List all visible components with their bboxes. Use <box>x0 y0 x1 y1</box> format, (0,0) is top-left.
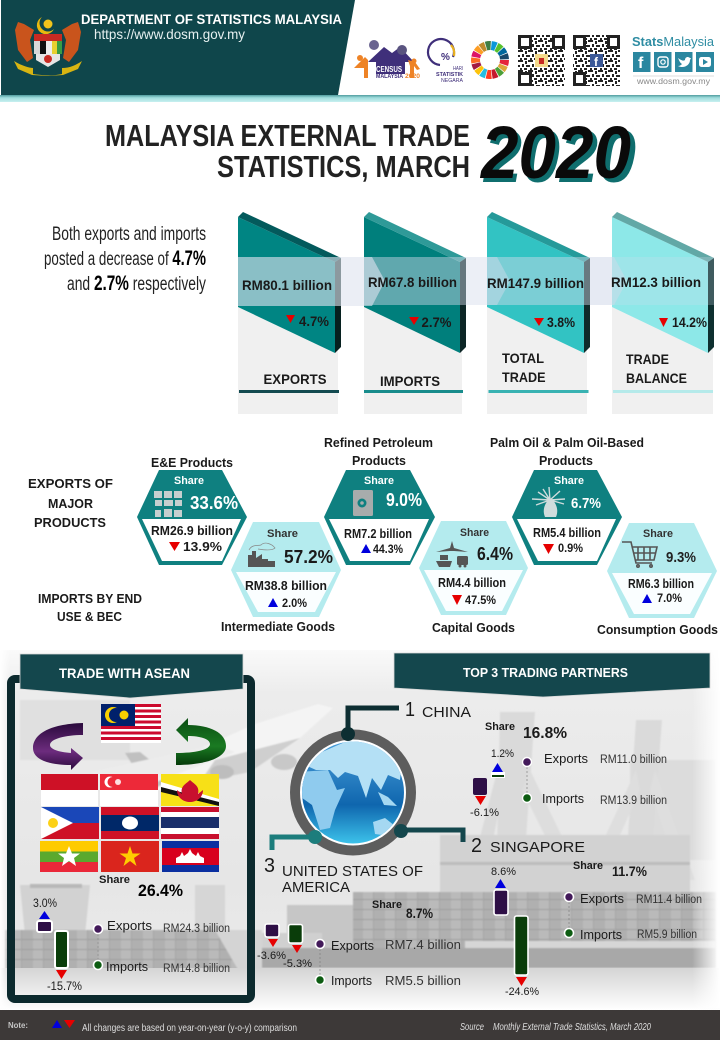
heading: trade with asean: TRADE WITH ASEAN <box>59 665 190 681</box>
icon: plane ship truck <box>436 541 468 568</box>
asean share <box>99 874 183 900</box>
partner: united states of america <box>257 855 461 988</box>
heading: top 3 trading partners <box>394 653 710 697</box>
cranes <box>496 712 535 895</box>
hexagon: refined petroleum products <box>324 436 435 565</box>
label: imports <box>364 373 463 393</box>
hexagon: e&e products <box>137 456 247 565</box>
statsmalaysia social block: www.dosm.gov.my <box>636 77 710 86</box>
summary text: posted a decrease of 4.7% <box>44 247 206 270</box>
logo: hari statistik negara: STATISTIK <box>436 72 463 78</box>
name <box>264 855 423 896</box>
values: Imports <box>580 927 622 942</box>
note label: Note: <box>8 1021 28 1030</box>
hexagon: palm oil products: 6.7% <box>571 495 601 512</box>
legend: asean values <box>94 918 230 975</box>
chart: asean changes <box>33 898 82 993</box>
hexagon: consumption goods: Consumption Goods <box>597 623 718 637</box>
title year 2020: 2020 <box>482 115 636 198</box>
hexagon: capital goods: Share <box>460 527 489 539</box>
chart: asean changes: 3.0% <box>33 898 57 910</box>
hexagon: intermediate goods: 2.0% <box>282 596 307 610</box>
label: total trade: TOTAL <box>502 350 544 366</box>
asean share: Share <box>99 874 130 886</box>
values: Imports <box>331 973 372 988</box>
change: trade balance: 14.2% <box>672 314 707 330</box>
change: exports: 4.7% <box>299 313 330 329</box>
logo: sdg wheel <box>470 40 510 80</box>
heading: exports of major products: EXPORTS OF <box>28 476 113 491</box>
changes <box>470 748 514 819</box>
header: department banner <box>1 0 355 95</box>
logo: census 2020: MALAYSIA <box>376 74 404 80</box>
card: imports <box>364 212 466 414</box>
chart: asean changes: -15.7% <box>47 981 82 993</box>
heading: imports by end use and bec <box>38 592 142 624</box>
hexagon: intermediate goods: Intermediate Goods <box>221 620 335 634</box>
hexagon: palm oil products: 0.9% <box>558 541 583 555</box>
heading: imports by end use and bec: USE & BEC <box>57 610 122 624</box>
card: exports <box>238 212 341 414</box>
values: RM5.9 billion <box>637 929 697 941</box>
summary text: Both exports and imports <box>52 224 206 245</box>
plane <box>125 704 333 792</box>
note text: All changes are based on year-on-year (y-o-y) comparison <box>82 1022 297 1034</box>
changes: 1.2% <box>491 748 514 760</box>
name: 1 <box>405 699 415 721</box>
panel frame <box>11 679 251 999</box>
values: Exports <box>544 751 588 766</box>
title: STATISTICS, MARCH <box>217 149 470 184</box>
share <box>485 721 567 742</box>
change: imports: 2.7% <box>422 314 452 330</box>
summary text: and 2.7% respectively <box>67 272 206 295</box>
hexagon: palm oil products: RM5.4 billion <box>533 526 601 540</box>
flag: singapore <box>100 774 158 806</box>
values: RM7.4 billion <box>385 938 461 952</box>
hexagon: palm oil products: Products <box>539 454 593 468</box>
change: trade balance <box>659 314 707 330</box>
label: exports <box>239 371 339 393</box>
flag: brunei <box>161 774 219 806</box>
share: 16.8% <box>523 725 567 742</box>
hexagon: consumption goods <box>597 523 718 637</box>
title <box>105 111 636 198</box>
statsmalaysia social block <box>632 34 715 86</box>
arrow: exports to asean <box>33 723 83 770</box>
statsmalaysia social block: f <box>638 55 644 72</box>
value: exports: RM80.1 billion <box>242 277 332 293</box>
sky patches <box>630 760 715 860</box>
values: Imports <box>542 791 584 806</box>
flag: laos <box>101 807 159 839</box>
hexagon: refined petroleum products: Refined Petroleum <box>324 436 433 450</box>
hexagon: consumption goods: RM6.3 billion <box>628 577 694 591</box>
ship hull <box>262 948 716 968</box>
logo: census 2020 <box>354 40 421 80</box>
name <box>405 699 471 721</box>
icon: coat of arms <box>14 17 82 76</box>
flag: thailand <box>161 807 219 839</box>
change: exports <box>286 313 330 329</box>
changes <box>257 924 312 970</box>
panel: headline trade figures <box>238 212 714 414</box>
icon: shopping cart <box>622 542 657 567</box>
share: Share <box>485 721 515 733</box>
department name: DEPARTMENT OF STATISTICS MALAYSIA <box>81 12 342 27</box>
header band <box>0 95 720 102</box>
legend: asean values: RM24.3 billion <box>163 923 230 935</box>
arrow band <box>238 257 714 306</box>
hexagon: e&e products: 33.6% <box>190 493 238 513</box>
hexagon: intermediate goods: 57.2% <box>284 547 333 567</box>
value: total trade: RM147.9 billion <box>487 275 584 291</box>
partner: china <box>405 699 667 819</box>
icon: factory <box>248 543 275 567</box>
card: trade balance <box>612 212 714 414</box>
name <box>471 835 585 857</box>
heading: exports of major products <box>28 476 113 530</box>
icon: palm tree <box>532 487 565 517</box>
changes: -6.1% <box>470 807 499 819</box>
values <box>522 751 667 807</box>
changes: -24.6% <box>505 986 539 998</box>
hexagon: intermediate goods: RM38.8 billion <box>245 579 327 593</box>
flag: myanmar <box>40 841 98 872</box>
title: MALAYSIA EXTERNAL TRADE <box>105 118 470 153</box>
logo: hari statistik negara: % <box>441 52 450 63</box>
share: Share <box>573 860 603 872</box>
share: 11.7% <box>612 863 647 879</box>
heading: imports by end use and bec: IMPORTS BY END <box>38 592 142 606</box>
icon: qr code facebook <box>573 35 620 86</box>
change: total trade <box>534 314 575 330</box>
hexagon: refined petroleum products: Share <box>364 475 394 487</box>
partner: singapore <box>471 835 702 998</box>
share <box>573 860 647 879</box>
containers <box>353 892 716 948</box>
changes: 8.6% <box>491 866 516 878</box>
change: imports <box>409 314 452 330</box>
name: UNITED STATES OF <box>282 863 423 880</box>
icon: qr code website <box>518 35 565 86</box>
website: https://www.dosm.gov.my <box>94 26 245 42</box>
values: RM11.4 billion <box>636 894 702 906</box>
globe <box>290 730 416 856</box>
changes: -5.3% <box>283 958 312 970</box>
legend: asean values: Imports <box>106 959 148 974</box>
name: 2 <box>471 835 482 857</box>
flags: asean members <box>40 774 219 872</box>
hexagon: consumption goods: 9.3% <box>666 549 696 566</box>
hexagon: refined petroleum products: RM7.2 billion <box>344 527 412 541</box>
logo: hari statistik negara: NEGARA <box>441 78 463 84</box>
hexagon: intermediate goods: Share <box>267 528 298 540</box>
hexagon: palm oil products <box>490 436 644 565</box>
hexagon: intermediate goods <box>221 522 341 634</box>
hexagon: e&e products: Share <box>174 475 204 487</box>
values: Exports <box>331 938 374 953</box>
icon: up and down triangles <box>52 1020 75 1028</box>
hexagon: refined petroleum products: Products <box>352 454 406 468</box>
summary text <box>44 224 206 295</box>
connector: singapore <box>394 824 463 842</box>
values: RM11.0 billion <box>600 754 667 766</box>
panel: top 3 trading partners <box>257 653 710 998</box>
icon: qr code facebook: f <box>594 55 599 69</box>
hexagon: e&e products: 13.9% <box>183 540 222 554</box>
asean share: 26.4% <box>138 881 183 900</box>
hexagon: capital goods: RM4.4 billion <box>438 576 506 590</box>
name: AMERICA <box>282 879 350 896</box>
title year 2020: 2020 <box>479 111 631 194</box>
hexagon: capital goods: 6.4% <box>477 544 513 564</box>
change: total trade: 3.8% <box>547 314 575 330</box>
connector: united states <box>272 830 322 850</box>
hexagon: e&e products: E&E Products <box>151 456 233 470</box>
label: trade balance: TRADE <box>626 351 669 367</box>
arrow: imports from asean <box>176 718 226 765</box>
hexagon: capital goods <box>419 521 528 635</box>
value: trade balance: RM12.3 billion <box>611 274 701 290</box>
hexagon: capital goods: Capital Goods <box>432 621 515 635</box>
heading: top 3 trading partners: TOP 3 TRADING PARTNERS <box>463 665 628 680</box>
flag: malaysia <box>101 704 161 743</box>
hexagon: refined petroleum products: 9.0% <box>386 490 422 510</box>
panel: trade with asean <box>11 654 251 999</box>
logo: hari statistik negara <box>428 39 463 84</box>
flag: philippines <box>41 807 99 839</box>
heading: exports of major products: MAJOR <box>48 496 94 511</box>
values <box>316 938 461 988</box>
heading: trade with asean <box>20 654 243 698</box>
flag: indonesia <box>41 774 98 806</box>
name: SINGAPORE <box>490 839 585 856</box>
background photo: port and plane <box>0 650 720 1010</box>
label: exports: EXPORTS <box>264 371 326 387</box>
values: RM13.9 billion <box>600 795 667 807</box>
heading: exports of major products: PRODUCTS <box>34 515 106 530</box>
label: trade balance: BALANCE <box>626 370 687 386</box>
source: Source <box>460 1021 484 1033</box>
label: total trade <box>488 350 588 393</box>
card: total trade <box>487 212 590 414</box>
hexagon: palm oil products: Palm Oil & Palm Oil-Based <box>490 436 644 450</box>
share: 8.7% <box>406 905 433 921</box>
logo: census 2020: 2020 <box>405 74 421 80</box>
hexagon: consumption goods: Share <box>643 528 673 540</box>
label: total trade: TRADE <box>502 369 546 385</box>
legend: asean values: RM14.8 billion <box>163 963 230 975</box>
logo: census 2020: CENSUS <box>376 65 403 74</box>
share <box>372 899 433 921</box>
hexagon: refined petroleum products: 44.3% <box>373 542 403 556</box>
statsmalaysia social block: StatsMalaysia <box>632 34 715 49</box>
hexagon: palm oil products: Share <box>554 475 584 487</box>
values: RM5.5 billion <box>385 974 461 988</box>
label: imports: IMPORTS <box>380 373 440 389</box>
hexagon: consumption goods: 7.0% <box>657 591 682 605</box>
source <box>460 1021 651 1033</box>
icon: electronics grid <box>154 491 182 517</box>
source: Monthly External Trade Statistics, March 2020 <box>493 1021 651 1033</box>
logos row <box>354 34 715 86</box>
icon: oil barrel <box>353 490 373 516</box>
legend: asean values: Exports <box>107 918 153 933</box>
changes: -3.6% <box>257 950 286 962</box>
label: trade balance <box>613 351 713 393</box>
logo: hari statistik negara: HARI <box>453 66 463 72</box>
values <box>564 891 702 942</box>
name: CHINA <box>422 704 471 721</box>
flag: vietnam <box>101 841 159 872</box>
hexagon: capital goods: 47.5% <box>465 593 496 607</box>
name: 3 <box>264 855 275 877</box>
flag: cambodia <box>162 841 219 872</box>
value: imports: RM67.8 billion <box>368 274 457 290</box>
footer <box>0 1010 720 1040</box>
values: Exports <box>580 891 624 906</box>
share: Share <box>372 899 402 911</box>
changes <box>491 866 539 998</box>
connector: china <box>341 708 399 741</box>
hexagon: e&e products: RM26.9 billion <box>151 524 233 538</box>
